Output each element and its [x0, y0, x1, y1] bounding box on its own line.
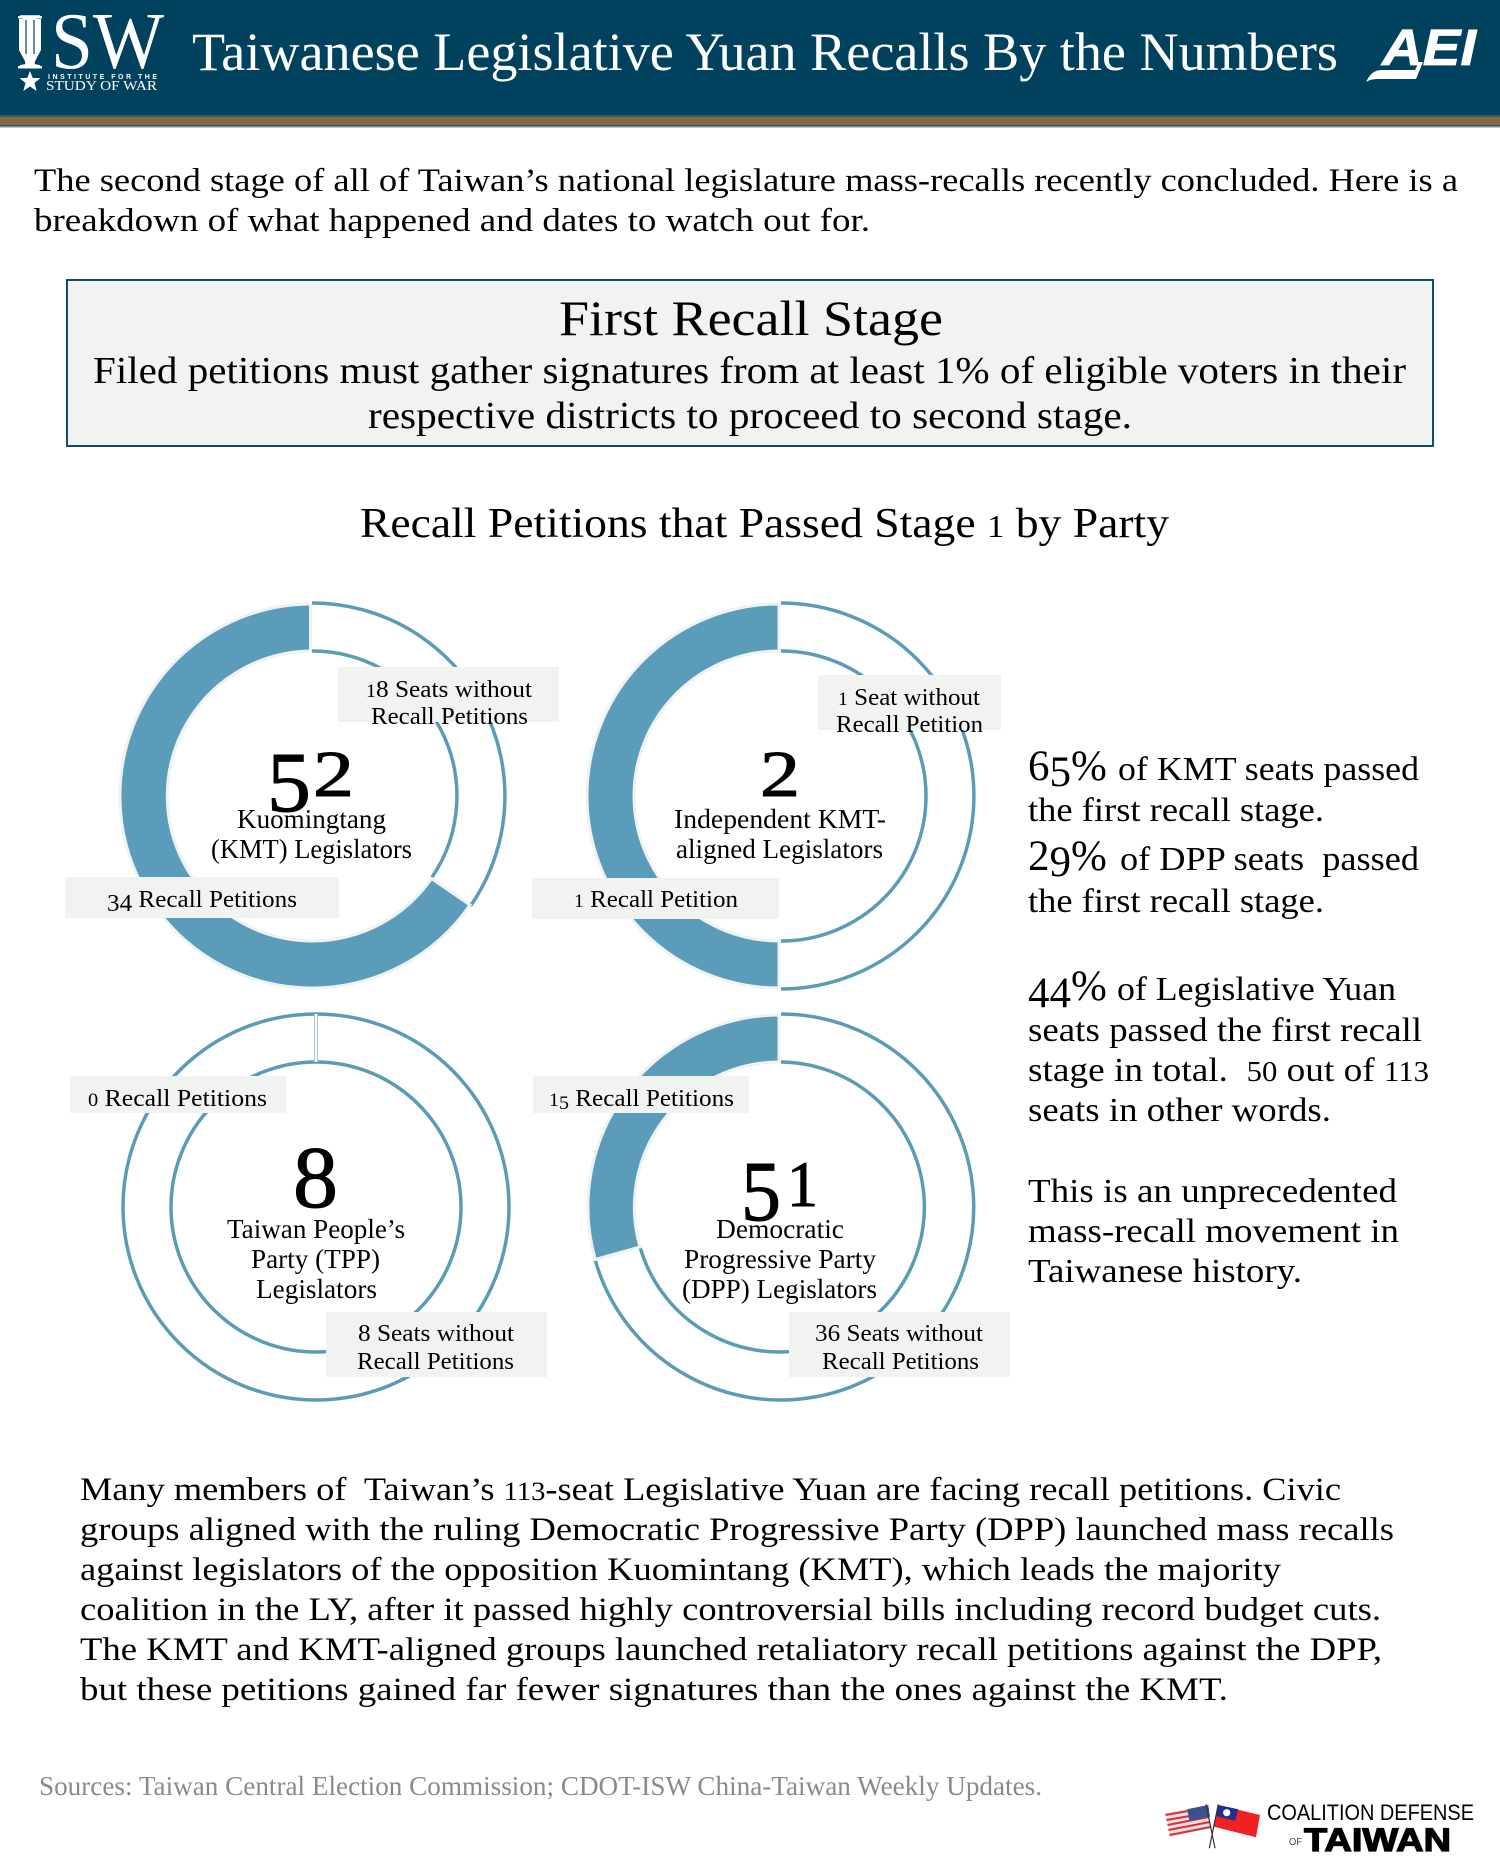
number: 51 DPP legislators: 5 — [741, 1143, 781, 1239]
callout: 15 recall petitions: Recall Petitions — [569, 1086, 734, 1112]
label: TPP legislators: Party (TPP) — [251, 1244, 380, 1274]
icon: crossed flags — [1165, 1804, 1260, 1848]
number: 52 KMT legislators — [267, 734, 354, 830]
callout: 8 seats without petitions: Recall Petitions — [357, 1349, 514, 1375]
callout: 36 seats without petitions — [815, 1321, 983, 1375]
text: stage description — [93, 350, 1406, 437]
stat: 29% of DPP seats: 2 — [1028, 833, 1050, 880]
callout: 8 seats without petitions — [357, 1321, 514, 1375]
stat: 65% of KMT seats: 6 — [1028, 743, 1050, 790]
stat: 44% of Legislative Yuan seats: 44 — [1028, 970, 1071, 1017]
stat: 29% of DPP seats: the first recall stage. — [1028, 883, 1324, 920]
callout: 15 recall petitions: 1 — [549, 1090, 559, 1111]
number: 52 KMT legislators: 2 — [313, 738, 354, 811]
logo: Coalition Defense of Taiwan: OF — [1289, 1837, 1302, 1848]
number: 2 independents: 2 — [760, 738, 800, 811]
stat: 65% of KMT seats: 5 — [1050, 749, 1071, 796]
text: background paragraph: groups aligned with the ruling Democratic Progressive Party (DPP) launched mass recalls — [80, 1512, 1394, 1548]
title: Taiwanese Legislative Yuan Recalls By the Numbers — [192, 22, 1338, 82]
label: Kuomintang: (KMT) Legislators — [211, 834, 412, 864]
label: DPP legislators: Progressive Party — [684, 1244, 876, 1274]
stat: 29% of DPP seats: 9 — [1050, 839, 1071, 886]
label: TPP legislators — [227, 1214, 405, 1304]
text: unprecedented movement — [1028, 1173, 1399, 1290]
number: 8 TPP legislators: 8 — [293, 1130, 338, 1227]
text: background paragraph: against legislators of the opposition Kuomintang (KMT), which leads the majority — [80, 1552, 1282, 1588]
logo: Coalition Defense of Taiwan — [1165, 1800, 1474, 1858]
donut chart: TPP — [70, 1014, 547, 1400]
logo: Institute for the Study of War: SW — [51, 0, 164, 86]
callout: 18 seats without petitions: 18 Seats without — [366, 677, 532, 703]
number: 52 KMT legislators: 5 — [267, 734, 311, 830]
panel: first recall stage — [67, 280, 1433, 446]
stat: 44% of Legislative Yuan seats: seats passed the first recall — [1028, 1012, 1422, 1049]
label: Kuomintang — [211, 804, 412, 864]
callout: 36 seats without petitions: Recall Petitions — [822, 1349, 979, 1375]
stat: 44% of Legislative Yuan seats — [1028, 963, 1429, 1129]
stat: 65% of KMT seats: % — [1071, 743, 1107, 790]
text: background paragraph: but these petitions gained far fewer signatures than the ones against the KMT. — [80, 1672, 1228, 1708]
logo: Institute for the Study of War: INSTITUTE FOR THE — [48, 74, 157, 81]
header band — [0, 0, 1500, 128]
text: stage description: Filed petitions must gather signatures from at least 1% of eligible voters in their — [93, 350, 1406, 392]
stat: 44% of Legislative Yuan seats: stage in total. 50 out of 113 — [1028, 1052, 1429, 1089]
stat: 44% of Legislative Yuan seats: of Legislative Yuan — [1117, 971, 1396, 1008]
logo: AEI: AEI — [1380, 19, 1478, 76]
label: DPP legislators: (DPP) Legislators — [682, 1274, 877, 1304]
stat: 29% of DPP seats: of DPP seats passed — [1120, 841, 1419, 878]
label: independent KMT-aligned legislators: aligned Legislators — [676, 834, 883, 864]
callout: 18 seats without petitions: Recall Petitions — [371, 704, 528, 730]
text: background paragraph — [80, 1472, 1394, 1708]
stat: 29% of DPP seats: % — [1071, 833, 1107, 880]
stat: 29% of DPP seats — [1028, 833, 1419, 920]
callout: 1 seat without petition: Recall Petition — [836, 712, 983, 738]
callout: 15 recall petitions: 5 — [559, 1093, 569, 1114]
stat: 44% of Legislative Yuan seats: seats in other words. — [1028, 1092, 1331, 1129]
callout: 1 seat without petition — [836, 685, 983, 738]
label: DPP legislators: Democratic — [716, 1214, 844, 1244]
chart heading: Recall Petitions that Passed Stage 1 by Party — [360, 501, 1169, 547]
stat: 65% of KMT seats — [1028, 743, 1419, 829]
label: TPP legislators: Legislators — [256, 1274, 377, 1304]
callout: 1 recall petition: 1 Recall Petition — [574, 887, 738, 913]
callout: 0 recall petitions: 0 Recall Petitions — [88, 1086, 267, 1112]
logo: Coalition Defense of Taiwan: TAIWAN — [1304, 1822, 1451, 1858]
intro text: breakdown of what happened and dates to watch out for. — [34, 203, 870, 239]
label: Kuomintang: Kuomingtang — [237, 804, 386, 834]
callout: 8 seats without petitions: 8 Seats without — [358, 1321, 514, 1347]
donut chart: KMT — [65, 603, 559, 988]
logo: Coalition Defense of Taiwan: COALITION DEFENSE — [1267, 1800, 1474, 1825]
stat: 44% of Legislative Yuan seats: % — [1071, 963, 1107, 1010]
callout: 18 seats without petitions — [366, 677, 532, 730]
stat: 65% of KMT seats: the first recall stage. — [1028, 792, 1324, 829]
label: independent KMT-aligned legislators: Independent KMT- — [674, 804, 886, 834]
text: background paragraph: Many members of Taiwan’s 113-seat Legislative Yuan are facing recall petitions. Civic — [80, 1472, 1341, 1508]
intro text: The second stage of all of Taiwan’s national legislature mass-recalls recently concluded. Here is a — [34, 163, 1458, 199]
text: background paragraph: coalition in the LY, after it passed highly controversial bills including record budget cuts. — [80, 1592, 1381, 1628]
logo: Institute for the Study of War: STUDY OF WAR — [46, 79, 158, 94]
logo: Institute for the Study of War — [18, 0, 164, 94]
label: independent KMT-aligned legislators — [674, 804, 886, 864]
heading: first recall stage: First Recall Stage — [559, 290, 943, 346]
logo: AEI — [1366, 19, 1478, 82]
callout: 34 recall petitions: Recall Petitions — [132, 887, 297, 913]
number: 51 DPP legislators — [741, 1143, 818, 1239]
sources: Sources: Taiwan Central Election Commission; CDOT-ISW China-Taiwan Weekly Updates. — [39, 1771, 1042, 1801]
donut chart: independent KMT-aligned — [532, 603, 1001, 989]
text: stage description: respective districts to proceed to second stage. — [368, 395, 1132, 437]
stat: 65% of KMT seats: of KMT seats passed — [1118, 751, 1419, 788]
donut chart: DPP — [533, 1014, 1010, 1400]
text: background paragraph: The KMT and KMT-aligned groups launched retaliatory recall petitions against the DPP, — [80, 1632, 1382, 1668]
callout: 34 recall petitions: 34 — [107, 891, 132, 917]
logo: Institute for the Study of War: I — [18, 0, 42, 86]
text: unprecedented movement: Taiwanese history. — [1028, 1253, 1302, 1290]
intro text — [34, 163, 1458, 239]
label: TPP legislators: Taiwan People’s — [227, 1214, 405, 1244]
number: 51 DPP legislators: 1 — [787, 1149, 818, 1221]
label: DPP legislators — [682, 1214, 877, 1304]
callout: 1 seat without petition: 1 Seat without — [838, 685, 980, 711]
callout: 36 seats without petitions: 36 Seats without — [815, 1321, 983, 1347]
text: unprecedented movement: This is an unprecedented — [1028, 1173, 1397, 1210]
text: unprecedented movement: mass-recall movement in — [1028, 1213, 1399, 1250]
